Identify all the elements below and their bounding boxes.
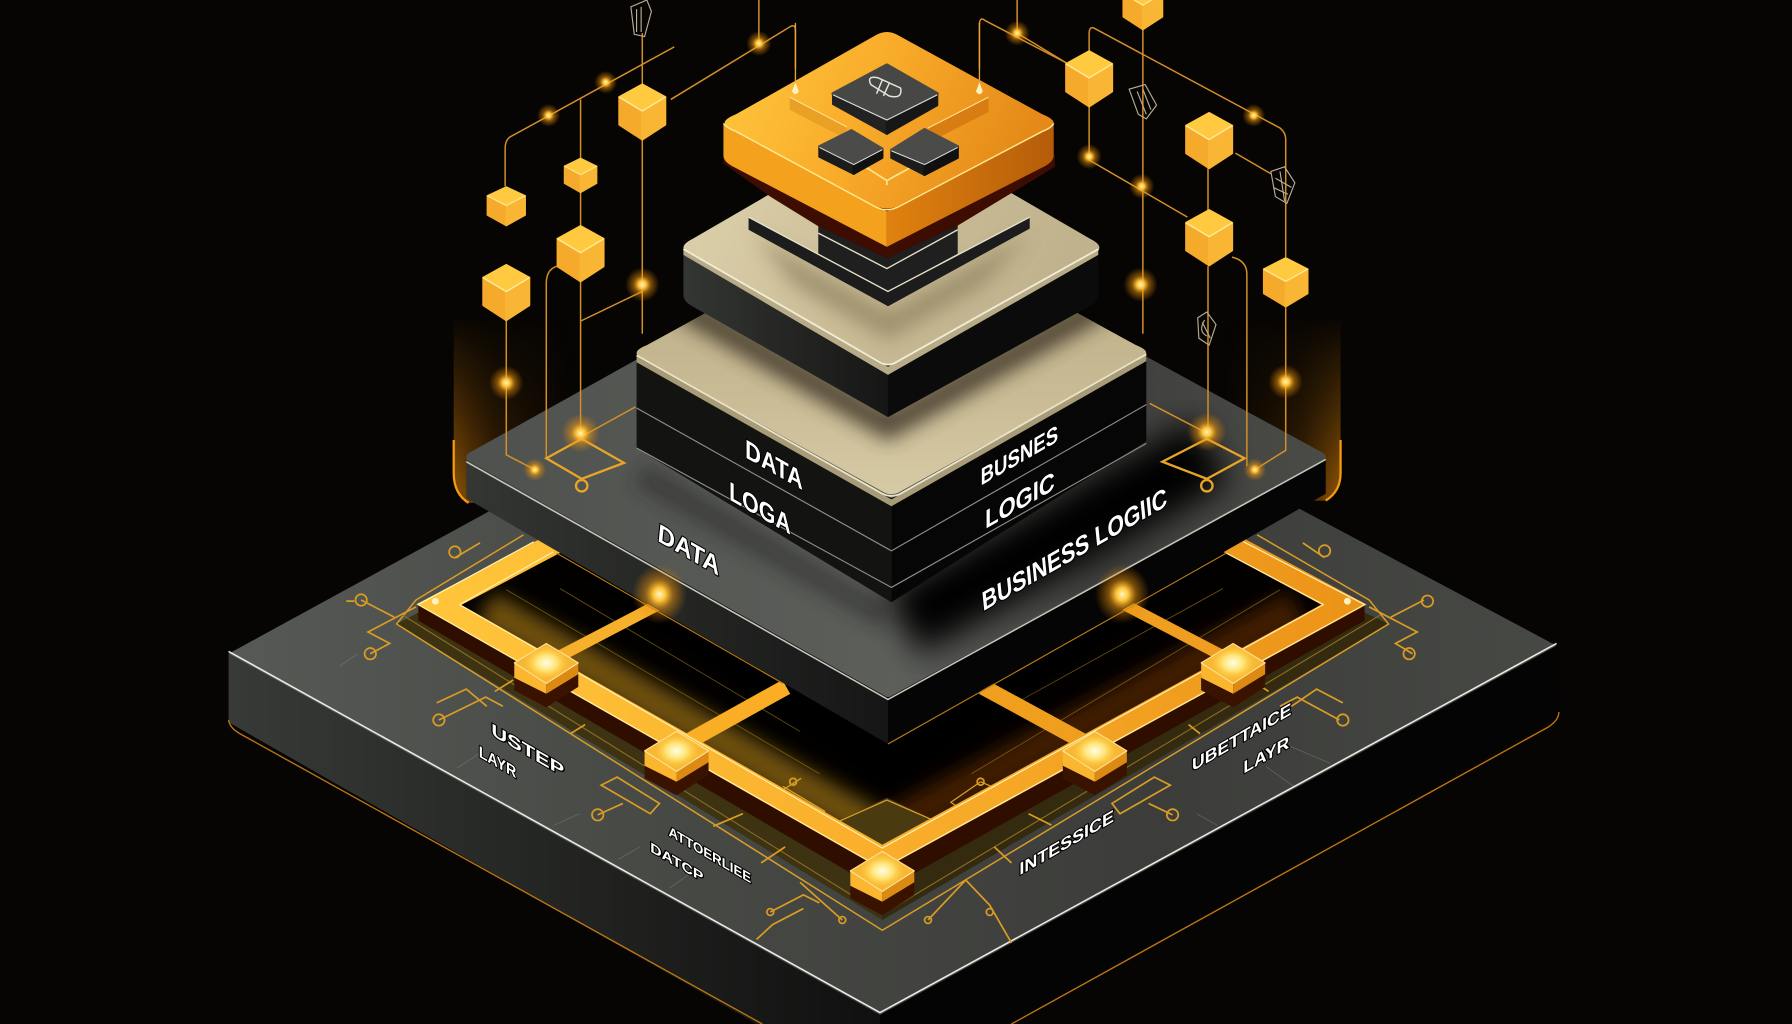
gold frame bbox=[439, 539, 1344, 857]
label: user layer left bbox=[479, 720, 564, 783]
block left side bbox=[637, 353, 891, 602]
faint gray lines on base bbox=[339, 654, 1330, 888]
icon: junction glow left bbox=[632, 565, 687, 624]
node: bottom bbox=[850, 851, 914, 915]
orange edge highlight bbox=[723, 123, 1054, 210]
label: attribute data: ATTOERLIEE bbox=[669, 823, 751, 886]
frame highlight bbox=[418, 542, 1365, 869]
layer lines bbox=[637, 405, 1146, 587]
base plate orange outline bbox=[229, 712, 1559, 1024]
raised tray bbox=[790, 23, 989, 185]
outer trace strips bbox=[397, 535, 1389, 930]
base plate right side bbox=[880, 646, 1560, 1024]
label: attribute data bbox=[650, 823, 751, 886]
inner dark stack bbox=[749, 215, 1030, 306]
panel: big layered block bbox=[636, 313, 1147, 602]
cube: far left small bbox=[488, 187, 525, 225]
label: business logic on slab: BUSINESS LOGIIC bbox=[980, 481, 1168, 617]
label: user layer left: USTEP bbox=[491, 720, 564, 781]
orange top surface bbox=[725, 32, 1054, 209]
panel: top orange block bbox=[723, 23, 1055, 258]
block right side bbox=[891, 353, 1146, 602]
cube: mid left bbox=[558, 226, 603, 281]
beige block top bbox=[683, 123, 1099, 364]
olive glow in hole bbox=[486, 589, 1297, 858]
slab orange underline bbox=[557, 553, 1226, 744]
label: loga: LOGA bbox=[729, 475, 791, 541]
glowing nodes bbox=[489, 21, 1303, 481]
orange right side bbox=[887, 123, 1054, 247]
cube: right one bbox=[1186, 113, 1232, 168]
node: right middle bbox=[1063, 731, 1127, 795]
label: data on slab: DATA bbox=[657, 519, 721, 582]
label: interface layer right: LAYR bbox=[1243, 731, 1290, 778]
node: right upper bbox=[1201, 643, 1265, 707]
panel: upper dark slab bbox=[466, 356, 1326, 744]
slab left side bbox=[466, 459, 888, 744]
branch connectors bbox=[560, 603, 1223, 743]
base plate left side bbox=[229, 654, 880, 1024]
label: interface layer right: UBETTAICE bbox=[1192, 698, 1291, 775]
label: data: DATA bbox=[745, 433, 803, 496]
slab edge highlight bbox=[466, 459, 1326, 699]
label: user layer left: LAYR bbox=[479, 744, 517, 783]
panel: base plate bbox=[229, 291, 1560, 1024]
cube: small left bbox=[565, 158, 597, 192]
shadow of upper slab bbox=[560, 560, 1223, 789]
icon: line glyph right one bbox=[1129, 85, 1157, 119]
icon: line glyph right two bbox=[1271, 167, 1295, 203]
icon: line glyph top bbox=[631, 0, 651, 37]
block edge highlight bbox=[637, 354, 1146, 496]
beige block lip bbox=[683, 249, 1098, 375]
label: attribute data: DATCP bbox=[650, 839, 703, 885]
icon: center chip bbox=[833, 65, 937, 134]
label: interface: INTESSICE bbox=[1019, 805, 1114, 879]
stack highlights bbox=[749, 217, 1030, 291]
beige edge highlight bbox=[683, 249, 1098, 365]
frame corner dots bbox=[432, 598, 1351, 605]
cube: top partial bbox=[1123, 0, 1162, 29]
slab shadow from block bbox=[640, 451, 1211, 623]
recessed hole under frame bbox=[459, 537, 1326, 851]
label: logic: LOGIC bbox=[985, 465, 1055, 535]
block lip bbox=[637, 355, 1146, 506]
panel: middle beige block bbox=[683, 193, 1100, 417]
icon: line glyph right three bbox=[1198, 312, 1216, 345]
frame underside bbox=[418, 605, 1365, 891]
beige block left side bbox=[683, 248, 888, 417]
slab right side bbox=[888, 459, 1326, 744]
beige block right side bbox=[888, 248, 1098, 417]
icon: right chip bbox=[891, 129, 958, 175]
center column bbox=[818, 215, 958, 291]
glow behind circuit columns bbox=[454, 320, 1341, 503]
tray band bbox=[749, 217, 1030, 306]
circuit traces on base bbox=[346, 543, 1433, 943]
circuit lines upper bbox=[505, 0, 1286, 491]
block top surface bbox=[637, 211, 1146, 494]
slab top surface bbox=[471, 223, 1321, 693]
orange left side bbox=[723, 123, 887, 247]
node: left upper bbox=[514, 643, 578, 707]
shadow from beige block bbox=[683, 306, 1099, 425]
cube: lower left bbox=[483, 265, 529, 320]
node: left middle bbox=[645, 731, 709, 795]
icon: junction glow right bbox=[1095, 565, 1150, 624]
orange underside shadow bbox=[723, 154, 1055, 258]
cube: upper right bbox=[1066, 51, 1112, 106]
base plate top surface bbox=[229, 291, 1557, 1015]
cube: right two bbox=[1186, 210, 1232, 265]
cube: lower right bbox=[1264, 258, 1307, 306]
base plate edge highlights bbox=[229, 643, 1557, 1013]
beige shadow from top block bbox=[754, 234, 1030, 341]
icon: left chip bbox=[819, 130, 882, 174]
label: busines: BUSNES bbox=[981, 420, 1058, 492]
cube: upper left large bbox=[619, 85, 665, 139]
